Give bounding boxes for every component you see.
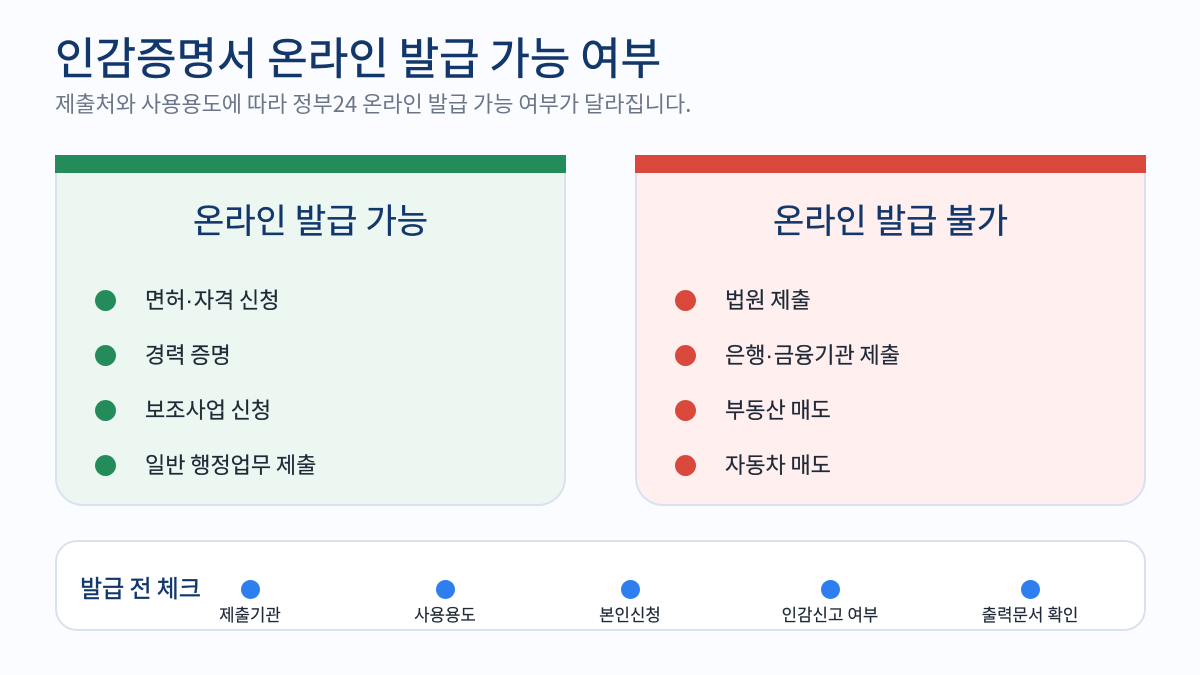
bullet: green xyxy=(95,400,116,421)
panel: online issuance unavailable xyxy=(635,155,1146,506)
check item: seal registration xyxy=(782,580,878,626)
dot xyxy=(436,580,455,599)
item: 일반 행정업무 제출 xyxy=(145,448,316,480)
label: 제출기관 xyxy=(219,602,281,626)
bullet: green xyxy=(95,345,116,366)
bullet: red xyxy=(675,290,696,311)
item: 면허·자격 신청 xyxy=(145,283,280,315)
check item: purpose xyxy=(414,580,476,626)
dot xyxy=(241,580,260,599)
bullet: red xyxy=(675,455,696,476)
label: 본인신청 xyxy=(599,602,661,626)
label: 인감신고 여부 xyxy=(782,602,878,626)
check item: verify printed document xyxy=(982,580,1078,626)
bullet: green xyxy=(95,290,116,311)
panel heading: 온라인 발급 불가 xyxy=(773,194,1008,243)
item: 경력 증명 xyxy=(145,338,231,370)
item: 자동차 매도 xyxy=(725,448,831,480)
title: 온라인 xyxy=(267,23,389,87)
title: 가능 xyxy=(489,23,570,87)
panel: online issuance available xyxy=(55,155,566,506)
bullet: green xyxy=(95,455,116,476)
label: 사용용도 xyxy=(414,602,476,626)
panel header bar: green xyxy=(55,155,566,173)
check item: in-person application xyxy=(599,580,661,626)
title: 발급 xyxy=(399,23,480,87)
bullet: red xyxy=(675,345,696,366)
panel heading: 온라인 발급 가능 xyxy=(193,194,428,243)
dot xyxy=(1021,580,1040,599)
dot xyxy=(821,580,840,599)
title: 여부 xyxy=(580,23,661,87)
dot xyxy=(621,580,640,599)
panel: pre-issuance checklist xyxy=(55,540,1146,631)
checklist heading: 발급 전 체크 xyxy=(80,569,201,604)
subtitle: 제출처와 사용용도에 따라 정부24 온라인 발급 가능 여부가 달라집니다. xyxy=(55,87,691,119)
bullet: red xyxy=(675,400,696,421)
check item: submission agency xyxy=(219,580,281,626)
item: 은행·금융기관 제출 xyxy=(725,338,900,370)
title xyxy=(55,23,661,87)
label: 출력문서 확인 xyxy=(982,602,1078,626)
panel header bar: red xyxy=(635,155,1146,173)
item: 부동산 매도 xyxy=(725,393,831,425)
item: 법원 제출 xyxy=(725,283,811,315)
item: 보조사업 신청 xyxy=(145,393,271,425)
title: 인감증명서 xyxy=(55,23,257,87)
